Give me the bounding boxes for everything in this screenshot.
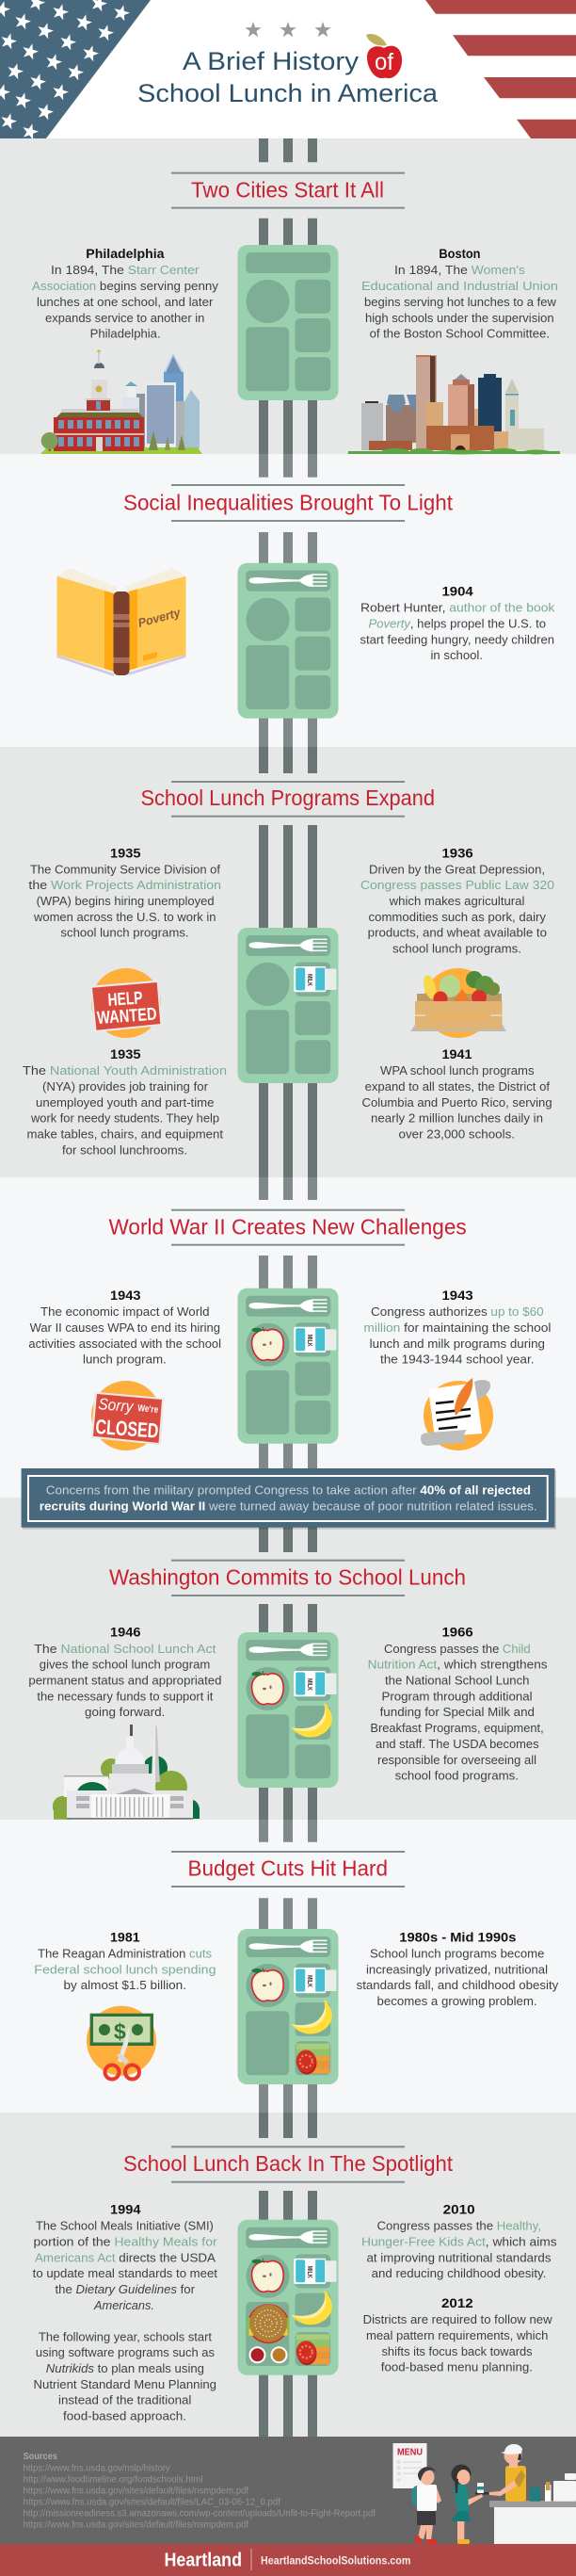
text: 1935 NYA: unemployed youth and part-time	[36, 1095, 215, 1110]
icon: lunch line illustration: MENU	[397, 2448, 423, 2458]
text: 1904: start feeding hungry, needy children	[360, 633, 554, 647]
icon: Boston skyline	[348, 355, 560, 454]
icon: scissors cutting money	[87, 2006, 156, 2080]
text: 1946	[28, 1625, 221, 1719]
sources list: https://www.fns.usda.gov/sites/default/files/nsmpdem.pdf	[24, 2486, 248, 2496]
text: 1943 right	[363, 1288, 552, 1366]
icon: scroll and quill	[421, 1378, 493, 1450]
text: 1943 left: lunch program.	[83, 1353, 167, 1366]
icon: help wanted sign: WANTED	[96, 1005, 157, 1029]
text: 1943 left: 1943	[110, 1288, 141, 1303]
tray 3 with fork and milk	[237, 928, 339, 1083]
text: 1935 WPA: the Work Projects Administration	[28, 878, 221, 892]
text: 2010 and 2012: 2010	[443, 2201, 475, 2216]
text: 1946: gives the school lunch program	[40, 1658, 210, 1672]
tray 5 with fork, milk, apple and banana	[237, 1632, 339, 1788]
text: 1966: responsible for overseeing all	[377, 1753, 536, 1767]
heading: budget cuts: Budget Cuts Hit Hard	[188, 1856, 388, 1881]
text: 1980s - Mid 1990s: School lunch programs become	[370, 1947, 544, 1961]
text: 1935 NYA: 1935	[110, 1046, 141, 1061]
text: 1966: school food programs.	[395, 1769, 519, 1782]
text: 1943 left: War II causes WPA to end its hiring	[30, 1320, 220, 1335]
title	[137, 47, 439, 107]
icon: apple with of	[366, 34, 402, 78]
sources list	[24, 2463, 376, 2530]
text: 1943 left: activities associated with the school	[28, 1337, 221, 1351]
text: 1981	[34, 1930, 216, 1992]
icon: closed sign	[91, 1381, 164, 1450]
tray 1 empty	[237, 245, 339, 400]
title: A Brief History	[183, 47, 360, 75]
sources list: http://missionreadiness.s3.amazonaws.com/wp-content/uploads/Unfit-to-Fight-Report.pdf	[24, 2508, 376, 2519]
tray 7 full meal	[237, 2220, 339, 2375]
text: Philadelphia	[32, 246, 218, 340]
heading: two cities: Two Cities Start It All	[191, 177, 384, 202]
text: 1904: Robert Hunter, author of the book	[360, 601, 555, 615]
text: 1935 NYA: work for needy students. They help	[30, 1111, 219, 1126]
text: Boston: of the Boston School Committee.	[370, 326, 550, 340]
heading: world war II: World War II Creates New Challenges	[109, 1215, 467, 1239]
text: 1994: The following year, schools start	[39, 2329, 212, 2343]
text: 1941: Columbia and Puerto Rico, serving	[361, 1095, 552, 1110]
icon: help wanted sign	[90, 968, 162, 1038]
tray 4 with fork, milk and apple: MILK	[306, 1335, 312, 1347]
text: Philadelphia: Philadelphia	[86, 246, 165, 261]
text: Boston: begins serving hot lunches to a few	[364, 295, 557, 309]
text: 1966: the National School Lunch	[385, 1673, 529, 1688]
text: 1935 WPA: school lunch programs.	[60, 925, 189, 940]
text: 1936: school lunch programs.	[392, 942, 521, 955]
icon: lunch line illustration	[393, 2443, 576, 2544]
text: 1994	[33, 2201, 217, 2422]
text: 1935 WPA	[28, 845, 221, 940]
text: 1943 right: 1943	[442, 1288, 473, 1303]
text: 1994: The School Meals Initiative (SMI)	[36, 2219, 214, 2233]
text: 1980s - Mid 1990s: standards fall, and childhood obesity	[357, 1978, 559, 1992]
sources list: http://www.foodtimeline.org/foodschools.html	[24, 2474, 202, 2485]
text: 1935 WPA: women across the U.S. to work in	[33, 910, 216, 924]
text: Boston: In 1894, The Women's	[394, 263, 526, 277]
text: 1941: expand to all states, the District of	[365, 1079, 550, 1094]
text: Philadelphia: Philadelphia.	[90, 326, 161, 340]
text: Boston: Boston	[439, 246, 480, 261]
text: 1936: commodities such as pork, dairy	[369, 910, 547, 924]
text: 2010 and 2012: and reducing childhood obesity.	[372, 2266, 546, 2280]
icon: Poverty book	[56, 568, 186, 676]
heading: programs expand: School Lunch Programs Expand	[141, 786, 435, 810]
text: 1936: products, and wheat available to	[368, 925, 547, 940]
callout: military recruits: Concerns from the military prompted Congress to take action after 40% of all rejected	[46, 1483, 531, 1498]
icon: closed sign: We're	[137, 1403, 159, 1416]
text: Boston: high schools under the supervision	[365, 311, 554, 325]
text: 1935 WPA: The Community Service Division of	[30, 862, 220, 876]
text: 1966: Breakfast Programs, equipment,	[370, 1721, 544, 1735]
text: 1966: Program through additional	[382, 1690, 533, 1703]
text: 1966	[368, 1625, 548, 1782]
text: 2010 and 2012: 2012	[441, 2295, 473, 2310]
text: 1980s - Mid 1990s: 1980s - Mid 1990s	[399, 1930, 517, 1945]
text: 1980s - Mid 1990s	[357, 1930, 559, 2008]
text: 1946: permanent status and appropriated	[28, 1673, 221, 1688]
website: HeartlandSchoolSolutions.com	[261, 2556, 410, 2568]
text: 1994: Nutrikids to plan meals using	[46, 2361, 204, 2375]
text: 1980s - Mid 1990s: becomes a growing problem.	[376, 1994, 537, 2008]
icon: Philadelphia skyline	[40, 349, 202, 454]
icon: Washington landmarks	[53, 1724, 200, 1820]
text: 2010 and 2012: shifts its focus back towards	[382, 2344, 533, 2358]
text: 1943 right: Congress authorizes up to $60	[371, 1304, 544, 1319]
text: 1966: 1966	[442, 1625, 473, 1640]
text: 1981: The Reagan Administration cuts	[38, 1947, 212, 1961]
text: 1994: instead of the traditional	[58, 2392, 192, 2407]
text: 1946: going forward.	[85, 1705, 165, 1719]
text: 1994: Nutrient Standard Menu Planning	[34, 2377, 216, 2391]
text: 2010 and 2012: Congress passes the Healthy,	[376, 2219, 541, 2233]
icon: closed sign: CLOSED	[95, 1415, 159, 1443]
text: 1941: WPA school lunch programs	[380, 1063, 535, 1077]
timeline bars	[259, 138, 317, 2437]
flag stars field	[0, 0, 151, 140]
text: Philadelphia: expands service to another in	[45, 311, 204, 325]
text: 1936	[360, 845, 554, 955]
text: 1935 NYA: (NYA) provides job training for	[42, 1079, 209, 1094]
text: 2010 and 2012: at improving nutritional standards	[367, 2250, 552, 2264]
heading: social inequalities: Social Inequalities Brought To Light	[123, 491, 454, 515]
text: 1936: Driven by the Great Depression,	[369, 862, 545, 876]
text: 1941: over 23,000 schools.	[399, 1126, 515, 1142]
icon: vegetable crate	[410, 968, 506, 1038]
text: 1935 NYA	[23, 1046, 227, 1157]
sources heading: Sources	[24, 2451, 57, 2462]
icon: apple with of: of	[375, 49, 393, 75]
text: 1904: Poverty, helps propel the U.S. to	[369, 617, 546, 631]
text: 1981: 1981	[110, 1930, 140, 1945]
text: Boston: Educational and Industrial Union	[361, 279, 558, 293]
text: 2010 and 2012: food-based menu planning.	[381, 2360, 533, 2373]
text: 1994: the Dietary Guidelines for	[55, 2282, 196, 2296]
tray 6 with fork, milk, apple, banana and vegetables	[237, 1929, 339, 2084]
text: 1994: using software programs such as	[36, 2345, 215, 2359]
heading: back in the spotlight: School Lunch Back In The Spotlight	[123, 2151, 454, 2176]
text: Philadelphia: Association begins serving penny	[32, 279, 218, 293]
flag stripes	[425, 0, 576, 138]
text: 1994: Americans Act directs the USDA	[35, 2250, 216, 2264]
callout: military recruits	[22, 1468, 556, 1530]
sources list: https://www.fns.usda.gov/nslp/history	[24, 2463, 170, 2473]
text: 1994: to update meal standards to meet	[33, 2266, 217, 2280]
tray 4 with fork, milk and apple	[237, 1288, 339, 1444]
text: 2010 and 2012	[361, 2201, 557, 2373]
footer band	[0, 2544, 576, 2576]
text: 1935 NYA: make tables, chairs, and equipment	[26, 1126, 223, 1142]
header panel	[0, 0, 576, 140]
text: 1943 right: the 1943-1944 school year.	[380, 1353, 535, 1366]
text: 1994: portion of the Healthy Meals for	[34, 2234, 217, 2249]
tray 5 with fork, milk, apple and banana: MILK	[306, 1678, 312, 1691]
text: 1935 WPA: 1935	[110, 845, 141, 860]
text: 1904	[360, 584, 555, 662]
text: 1981: Federal school lunch spending	[34, 1963, 216, 1976]
text: Boston	[361, 246, 558, 340]
text: 1994: food-based approach.	[63, 2409, 186, 2422]
icon: help wanted sign: HELP	[107, 988, 143, 1011]
icon: Poverty book: Poverty	[136, 605, 183, 630]
sources list: https://www.fns.usda.gov/sites/default/files/LAC_03-06-12_0.pdf	[24, 2497, 280, 2507]
text: 1941: nearly 2 million lunches daily in	[371, 1111, 543, 1126]
text: 1966: funding for Special Milk and	[380, 1705, 535, 1719]
text: 1943 left: The economic impact of World	[40, 1304, 209, 1319]
text: 1941	[361, 1046, 552, 1142]
text: 1966: Nutrition Act , which strengthens	[368, 1658, 548, 1672]
text: 2010 and 2012: meal pattern requirements, which	[366, 2328, 548, 2342]
logo: Heartland: Heartland	[164, 2551, 242, 2571]
text: 1980s - Mid 1990s: increasingly privatized, nutritional	[366, 1963, 548, 1976]
three stars	[245, 22, 331, 37]
title: School Lunch in America	[137, 79, 439, 107]
text: 1966: and staff. The USDA becomes	[376, 1737, 539, 1751]
text: 1943 right: million for maintaining the school	[363, 1320, 552, 1335]
text: 1946: the necessary funds to support it	[37, 1690, 214, 1703]
text: 1943 left	[28, 1288, 221, 1366]
text: 1935 WPA: (WPA) begins hiring unemployed	[37, 894, 215, 908]
panel: sources	[0, 2437, 576, 2544]
tray 7 full meal: MILK	[306, 2266, 312, 2278]
text: 1904: 1904	[442, 584, 473, 599]
text: 1994: Americans.	[93, 2298, 154, 2312]
text: 2010 and 2012: Hunger-Free Kids Act , which aims	[361, 2234, 557, 2249]
text: Philadelphia: lunches at one school, and later	[37, 295, 214, 309]
text: 1935 NYA: for school lunchrooms.	[62, 1143, 187, 1157]
text: 1904: in school.	[431, 648, 483, 662]
text: 1994: 1994	[110, 2201, 141, 2216]
text: 1936: 1936	[442, 845, 473, 860]
icon: closed sign: Sorry	[98, 1395, 136, 1416]
text: 1981: by almost $1.5 billion.	[64, 1978, 186, 1992]
text: 1936: Congress passes Public Law 320	[360, 878, 554, 892]
text: 1946: 1946	[110, 1625, 141, 1640]
text: 1943 right: lunch and milk programs during	[370, 1337, 545, 1351]
sources list: https://www.fns.usda.gov/sites/default/files/nsmpdem.pdf	[24, 2519, 248, 2530]
tray 3 with fork and milk: MILK	[306, 974, 312, 986]
text: 1936: which makes agricultural	[389, 894, 525, 908]
text: Philadelphia: In 1894, The Starr Center	[51, 263, 200, 277]
tray 2 with fork	[237, 563, 339, 719]
text: 1946: The National School Lunch Act	[34, 1642, 216, 1656]
heading: washington commits: Washington Commits to School Lunch	[109, 1565, 466, 1590]
icon: scissors cutting money: $	[114, 2019, 126, 2044]
text: 1966: Congress passes the Child	[384, 1642, 531, 1656]
text: 1941: 1941	[442, 1046, 472, 1061]
text: 1935 NYA: The National Youth Administration	[23, 1063, 227, 1077]
text: 2010 and 2012: Districts are required to follow new	[363, 2312, 552, 2326]
tray 6 with fork, milk, apple, banana and vegetables: MILK	[306, 1975, 312, 1987]
callout: military recruits: recruits during World War II were turned away because of poor nutrition related issues.	[40, 1499, 537, 1513]
